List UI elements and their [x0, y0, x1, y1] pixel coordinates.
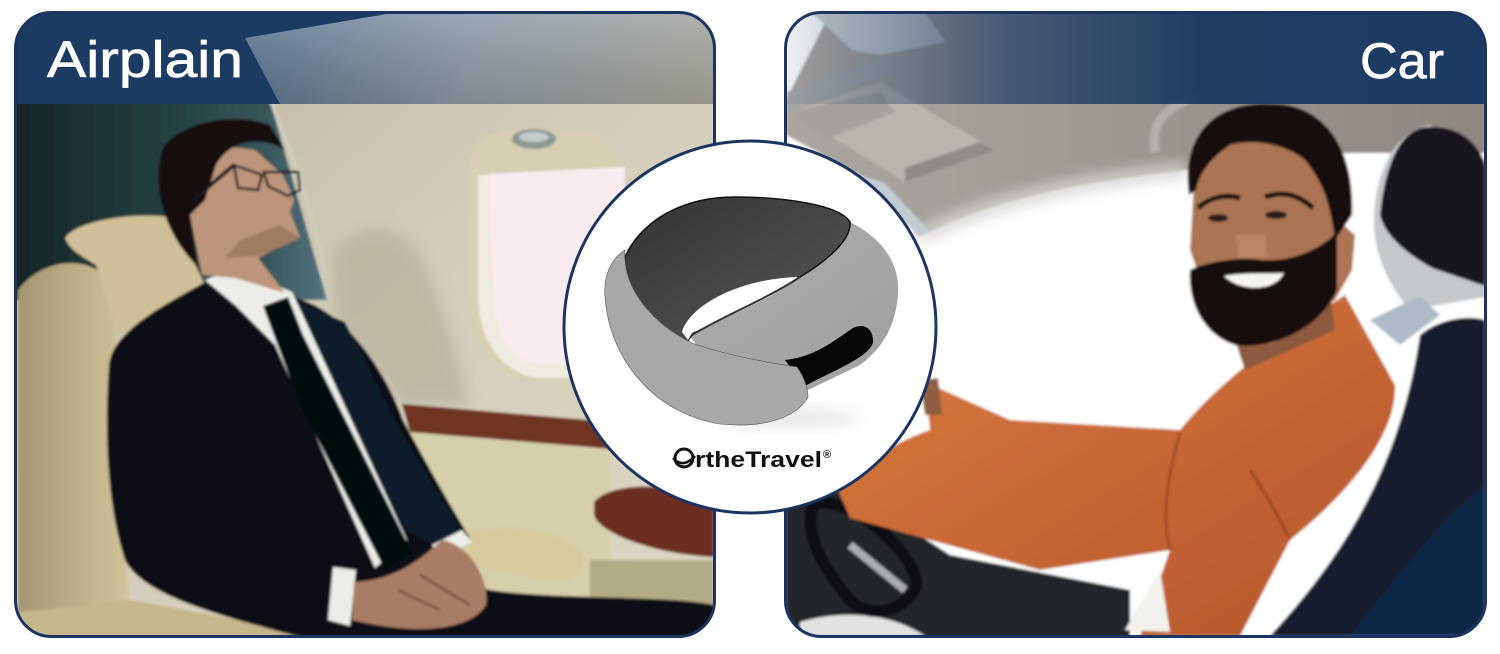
cuff [328, 530, 472, 626]
window frame [477, 174, 570, 379]
header tint [245, 14, 713, 104]
suit body [107, 282, 714, 640]
pillow front lip [605, 250, 808, 425]
shirt fold shadows [1166, 432, 1290, 550]
headliner [786, 13, 1485, 237]
visor clip [905, 142, 995, 182]
hands [352, 540, 487, 629]
blue corner wedge [860, 175, 930, 237]
visor bar [787, 90, 792, 98]
eyes and brows [1198, 194, 1313, 222]
face and ear [1190, 134, 1355, 345]
headrest [65, 216, 205, 335]
heading: airplain: Airplain [47, 31, 243, 88]
header band [786, 13, 1485, 104]
pillow opening [682, 277, 800, 340]
sun visor [808, 83, 980, 181]
cabin wall [17, 104, 713, 620]
lower wall [402, 425, 610, 600]
white trousers [800, 615, 925, 636]
white undershirt [1125, 570, 1170, 632]
window recess [504, 366, 519, 376]
panel: car [786, 12, 1486, 640]
steering wheel [810, 502, 917, 611]
seat back [18, 263, 130, 620]
logo [673, 447, 831, 472]
tie [263, 297, 412, 570]
headrest [1374, 125, 1485, 310]
hand [920, 378, 942, 415]
beard [1190, 232, 1337, 346]
reading light [512, 129, 556, 149]
pillow back lobe [627, 197, 898, 390]
wood table [594, 486, 714, 557]
dashboard [786, 490, 1130, 640]
neck [1225, 290, 1335, 370]
pillow shadow [720, 406, 860, 430]
logo: ® [823, 449, 831, 461]
overhead console [812, 13, 946, 55]
panel: airplain [14, 12, 714, 640]
hair [158, 119, 285, 267]
window glass [488, 167, 625, 364]
glasses [193, 165, 300, 200]
pillow seam [692, 277, 800, 335]
heading: car: Car [1360, 33, 1444, 89]
panel border [786, 12, 1486, 636]
header navy area [14, 13, 392, 104]
smile [1224, 273, 1284, 288]
wood ledge [402, 404, 612, 449]
navy lapel [293, 300, 462, 545]
seat [1270, 296, 1485, 636]
dark left bulkhead [17, 104, 328, 303]
wall shadow [332, 229, 470, 405]
armrest [462, 528, 583, 580]
light edge of headliner [919, 170, 1187, 237]
pillow mesh interior [625, 197, 850, 345]
grab handle [1149, 104, 1191, 153]
black slot [785, 326, 873, 386]
seat base [19, 599, 301, 635]
shirt and arm [838, 295, 1395, 636]
bright windshield [892, 152, 1484, 635]
panel border [16, 12, 714, 636]
neck and face [190, 145, 300, 293]
shirt [205, 268, 407, 568]
hair [1188, 104, 1352, 240]
bulkhead trim [268, 104, 320, 250]
logo: rtheTravel [695, 447, 822, 472]
product circle [564, 141, 936, 513]
icon: neck pillow [605, 197, 898, 472]
